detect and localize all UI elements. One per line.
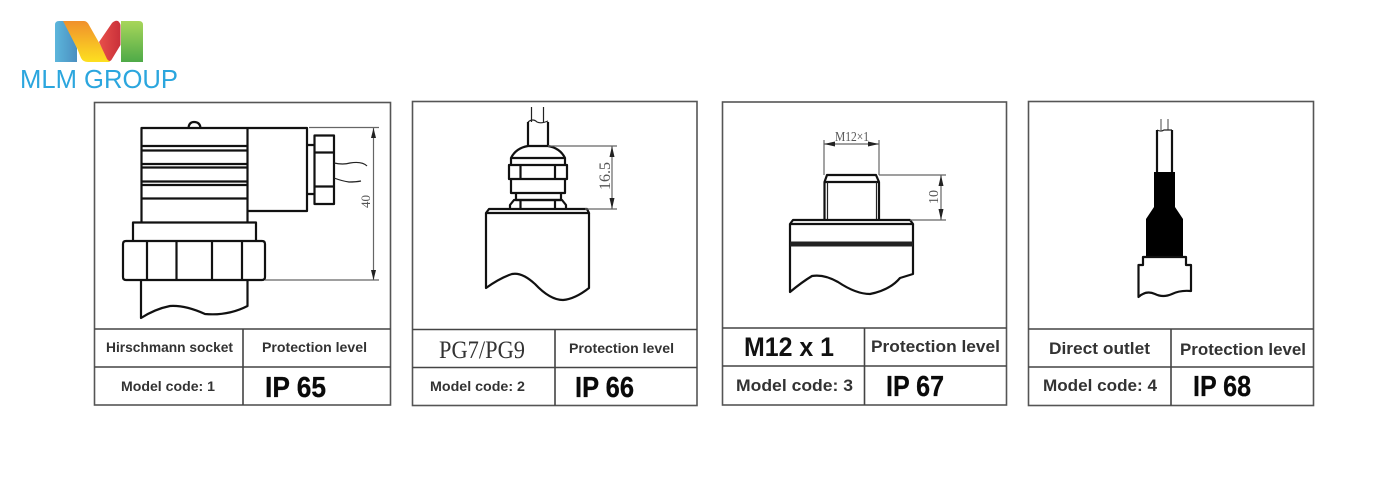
spec table: IP 65 — [265, 372, 326, 404]
diagram: M12 x 1 connector — [790, 129, 946, 294]
spec table: Model code: 2 — [430, 378, 525, 394]
spec table: IP 68 — [1193, 371, 1251, 403]
spec table: IP 66 — [575, 372, 634, 404]
spec table: Protection level — [871, 338, 1000, 356]
dimension label: M12×1: M12×1 — [835, 129, 869, 144]
spec table: IP 67 — [886, 371, 944, 403]
spec table: PG7/PG9 — [439, 337, 525, 364]
spec table — [1028, 329, 1314, 406]
spec table: Model code: 3 — [736, 377, 853, 395]
panel: PG7/PG9, IP 66 — [412, 102, 697, 406]
dimension label: 16.5: 16.5 — [597, 162, 614, 190]
logo wordmark: MLM GROUP — [20, 66, 178, 94]
spec table: Protection level — [1180, 341, 1306, 359]
spec table: Direct outlet — [1049, 340, 1151, 358]
logo: MLM Group — [20, 21, 178, 94]
diagram: PG7/PG9 gland connector — [486, 107, 617, 300]
panel: Hirschmann socket, IP 65 — [94, 102, 390, 405]
spec table — [412, 330, 697, 406]
diagram: direct outlet cable — [1138, 119, 1191, 297]
spec table: Protection level — [262, 339, 367, 355]
spec table: Hirschmann socket — [106, 339, 233, 355]
spec table — [722, 328, 1006, 405]
spec table — [94, 329, 390, 405]
spec table: Model code: 1 — [121, 378, 215, 394]
icon: colourful M mark — [55, 21, 143, 62]
panel: M12 x 1, IP 67 — [722, 102, 1006, 405]
diagram: Hirschmann socket connector — [123, 122, 379, 318]
spec table: Protection level — [569, 340, 674, 356]
spec table: M12 x 1 — [744, 332, 834, 362]
dimension label: 40: 40 — [358, 195, 373, 208]
dimension label: 10: 10 — [927, 190, 942, 204]
spec table: Model code: 4 — [1043, 377, 1158, 395]
panel: Direct outlet, IP 68 — [1028, 102, 1314, 406]
